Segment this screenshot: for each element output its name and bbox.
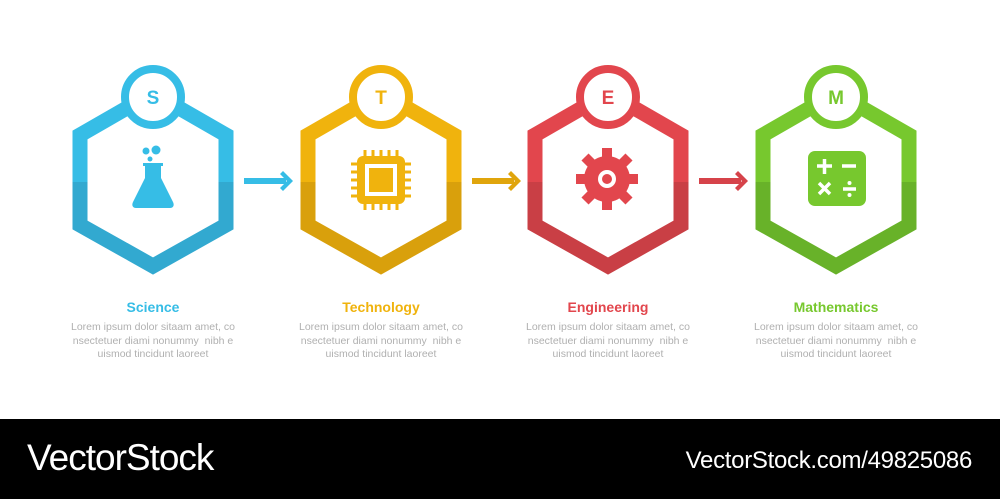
footer url: VectorStock.com/49825086: [686, 447, 972, 474]
arrow 2: [472, 171, 521, 191]
icon: gear: [576, 148, 638, 210]
label: Science: Science: [127, 299, 179, 315]
step: Engineering: [535, 69, 681, 266]
arrow 1: [244, 171, 293, 191]
text: Technology: nsectetuer diami nonummy nibh e: [301, 334, 461, 346]
text: Science: [71, 321, 235, 360]
step: Technology: T: [375, 88, 387, 109]
text: Engineering: Lorem ipsum dolor sitaam amet, co: [526, 321, 690, 333]
text: Engineering: [526, 321, 690, 360]
arrow 3: [699, 171, 748, 191]
diagram: [72, 65, 916, 275]
step: Mathematics: [763, 69, 909, 266]
text: Technology: [299, 321, 463, 360]
text: Science: uismod tincidunt laoreet: [98, 348, 208, 360]
step: Engineering: E: [602, 88, 614, 109]
text: Technology: Lorem ipsum dolor sitaam amet, co: [299, 321, 463, 333]
label: Engineering: Engineering: [568, 299, 648, 315]
text: Science: Lorem ipsum dolor sitaam amet, co: [71, 321, 235, 333]
text: Engineering: nsectetuer diami nonummy nibh e: [528, 334, 688, 346]
step: Science: [80, 69, 226, 266]
text: Mathematics: Lorem ipsum dolor sitaam amet, co: [754, 321, 918, 333]
text: Science: nsectetuer diami nonummy nibh e: [73, 334, 233, 346]
text: Mathematics: [754, 321, 918, 360]
icon: chip: [351, 150, 411, 210]
step: Science: S: [147, 88, 159, 109]
text: Technology: uismod tincidunt laoreet: [326, 348, 436, 360]
text: Mathematics: uismod tincidunt laoreet: [781, 348, 891, 360]
step: Mathematics: M: [828, 88, 844, 109]
step: Technology: [308, 69, 454, 266]
icon: calculator: [808, 151, 866, 206]
footer bar: [0, 419, 1000, 499]
icon: flask: [132, 146, 174, 208]
label: Technology: Technology: [342, 299, 420, 315]
label: Mathematics: Mathematics: [794, 299, 878, 315]
text: Engineering: uismod tincidunt laoreet: [553, 348, 663, 360]
footer logo: VectorStock: [27, 437, 213, 478]
text: Mathematics: nsectetuer diami nonummy nibh e: [756, 334, 916, 346]
